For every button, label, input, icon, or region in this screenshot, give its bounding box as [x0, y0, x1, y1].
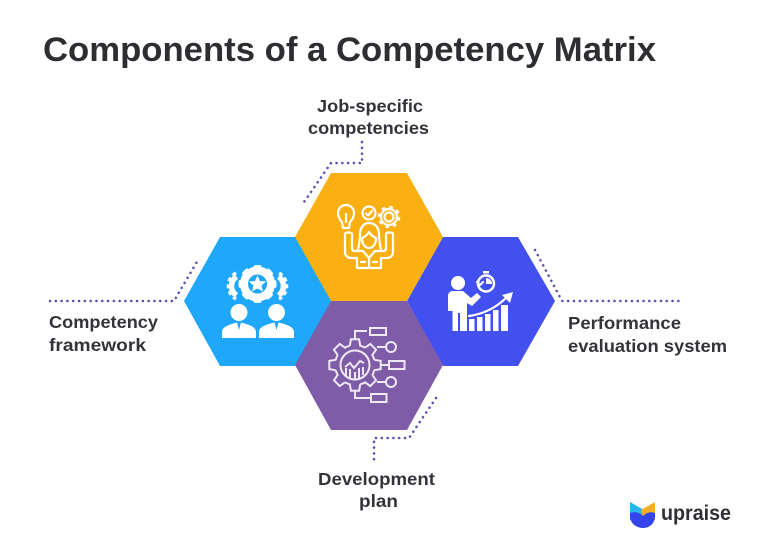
label: job-specific competencies: [308, 96, 429, 138]
connector: performance evaluation: [535, 250, 684, 301]
label: development plan: Development: [318, 469, 435, 489]
connector: competency framework: [50, 260, 198, 301]
icon: person with idea, check and gear: [338, 205, 399, 268]
hexagon: job-specific: [295, 173, 443, 301]
hexagon: development plan: [295, 301, 443, 430]
icon: person with stopwatch and growth chart: [448, 271, 513, 331]
label: competency framework: [49, 312, 158, 355]
label: competency framework: Competency: [49, 312, 158, 332]
icon: team with gears: [222, 267, 294, 338]
label: competency framework: framework: [49, 335, 146, 355]
hexagon: competency framework: [184, 237, 332, 366]
label: performance evaluation system: evaluation system: [568, 336, 727, 356]
label: development plan: [318, 469, 435, 511]
label: job-specific competencies: competencies: [308, 118, 429, 138]
label: performance evaluation system: [568, 313, 727, 356]
logo wordmark: upraise: [661, 502, 731, 525]
label: job-specific competencies: Job-specific: [317, 96, 423, 116]
title: Components of a Competency Matrix: [43, 31, 656, 69]
hexagon: performance evaluation: [407, 237, 555, 366]
icon: gear with chart and nodes: [329, 328, 404, 402]
logo mark: [630, 502, 655, 528]
logo: upraise: [630, 502, 731, 528]
label: performance evaluation system: Performance: [568, 313, 681, 333]
label: development plan: plan: [359, 491, 398, 511]
connector: job-specific: [302, 142, 362, 205]
connector: development plan: [374, 398, 436, 461]
